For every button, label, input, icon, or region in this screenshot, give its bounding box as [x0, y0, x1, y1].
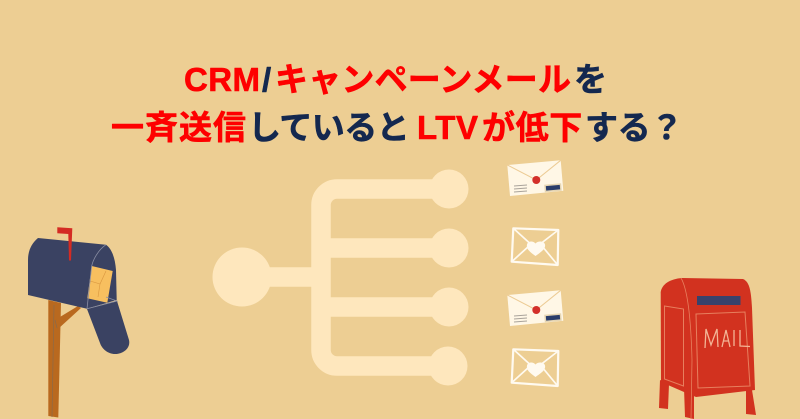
mailbox strut — [55, 306, 81, 329]
title line 2: 一斉送信 — [111, 109, 247, 146]
icon: heart envelope 2 — [512, 349, 558, 386]
letter fold lines — [90, 271, 106, 297]
mailbox outlines — [87, 245, 117, 309]
source node — [212, 248, 272, 306]
title — [111, 61, 683, 146]
target node 3 — [430, 288, 468, 326]
mailbox body — [28, 238, 117, 309]
drop box body — [661, 278, 755, 397]
title line 2 — [111, 109, 683, 146]
drop box slot — [697, 296, 740, 305]
mailbox post — [48, 300, 61, 418]
drop box legs — [659, 380, 756, 419]
icon: heart envelope 1 — [512, 228, 558, 265]
drop box MAIL lettering — [705, 329, 750, 348]
mailbox letter — [87, 266, 113, 303]
title line 2: する？ — [585, 109, 683, 146]
title line 1: キャンペーンメール — [275, 61, 571, 98]
target node 2 — [430, 228, 468, 268]
drop box side panel — [664, 306, 684, 386]
title line 2: LTV — [417, 109, 478, 146]
icon: red mail drop box — [659, 278, 756, 419]
drop box edge — [681, 278, 692, 419]
branching diagram — [212, 170, 468, 386]
title line 1: CRM — [184, 61, 260, 98]
mailbox door — [87, 301, 129, 354]
title line 1: / — [262, 61, 271, 98]
mailbox flag — [57, 227, 72, 260]
title line 1: を — [574, 61, 607, 98]
drop box front panel — [696, 312, 750, 388]
post detail line — [52, 305, 57, 417]
title line 2: が低下 — [482, 109, 583, 146]
target node 1 — [430, 170, 468, 208]
icon: sealed envelope 1 — [507, 160, 563, 196]
icon: sealed envelope 2 — [507, 290, 563, 326]
branch lines — [242, 189, 449, 366]
title line 2: していると — [248, 109, 409, 146]
icon: blue mailbox on wooden post — [28, 227, 129, 418]
target node 4 — [428, 346, 468, 386]
